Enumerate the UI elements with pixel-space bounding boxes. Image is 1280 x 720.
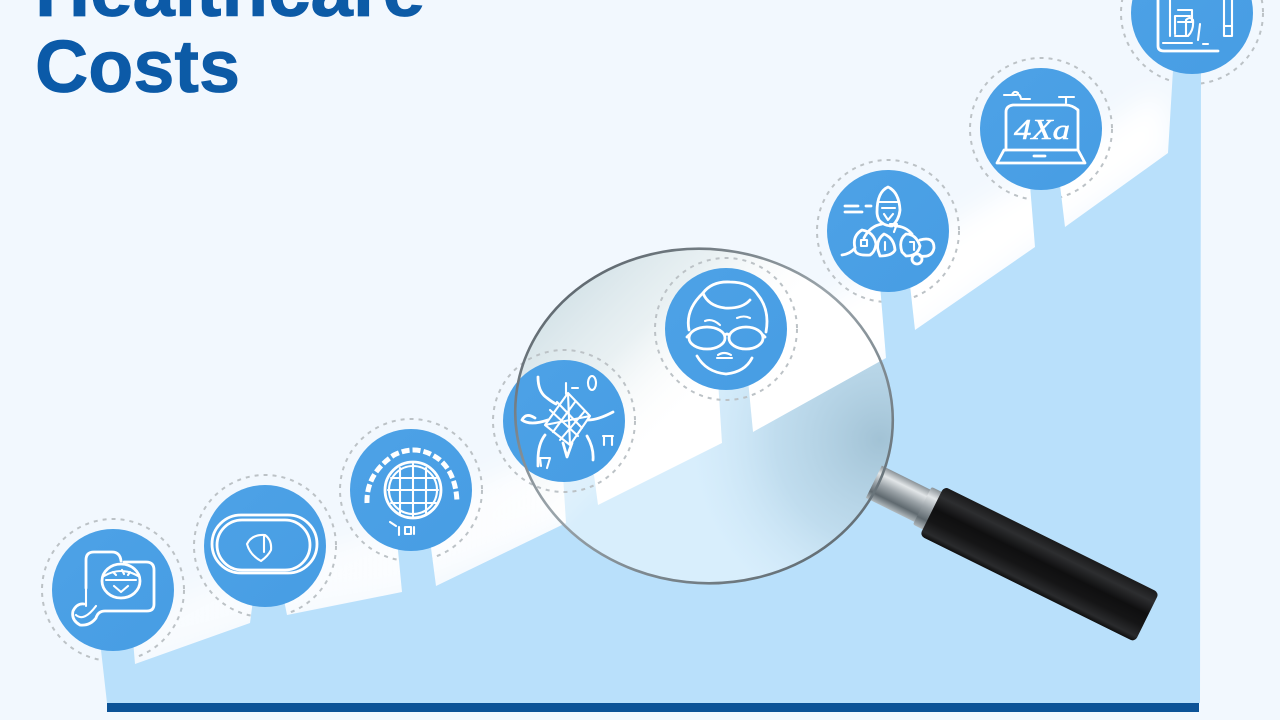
icon 1: phone and chat bubble xyxy=(52,529,174,651)
white glow band above the rising area xyxy=(135,90,1173,664)
magnifying glass lens interior xyxy=(520,250,892,582)
icon 5: face with glasses xyxy=(665,268,787,390)
icon 3: globe with surrounding marks xyxy=(350,429,472,551)
icon 2: double rounded pill with shield xyxy=(204,485,326,607)
magnifying glass handle xyxy=(861,458,1159,642)
baseline bar xyxy=(107,703,1199,712)
icon 8: document with chart and pen xyxy=(1131,0,1253,74)
icon 4: web network xyxy=(503,360,625,482)
icon 7: laptop xyxy=(980,68,1102,190)
magnifying glass rim xyxy=(499,230,909,602)
black grip xyxy=(920,486,1159,642)
metal ferrule xyxy=(865,463,942,530)
title: Costs xyxy=(35,25,240,108)
rising area chart xyxy=(101,70,1201,703)
icon 6: person with money bags xyxy=(827,170,949,292)
icon 7: laptop: 4Xa xyxy=(1014,115,1070,146)
title xyxy=(35,0,425,108)
